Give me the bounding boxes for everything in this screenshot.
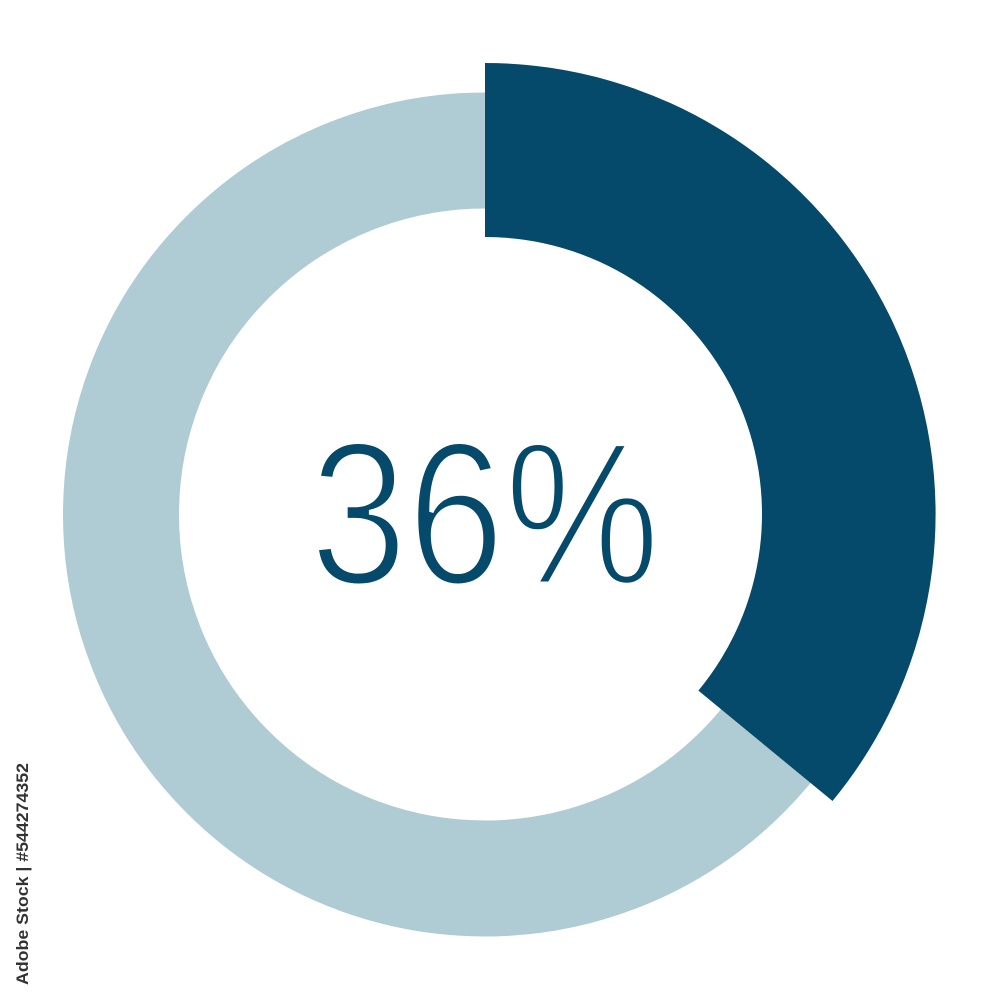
center percentage label: 36%	[310, 400, 660, 628]
stock id side text: Adobe Stock | #544274352	[13, 763, 32, 985]
donut chart: 36%	[121, 63, 936, 878]
highlighted segment 36%	[485, 63, 936, 801]
background ring	[121, 150, 849, 878]
